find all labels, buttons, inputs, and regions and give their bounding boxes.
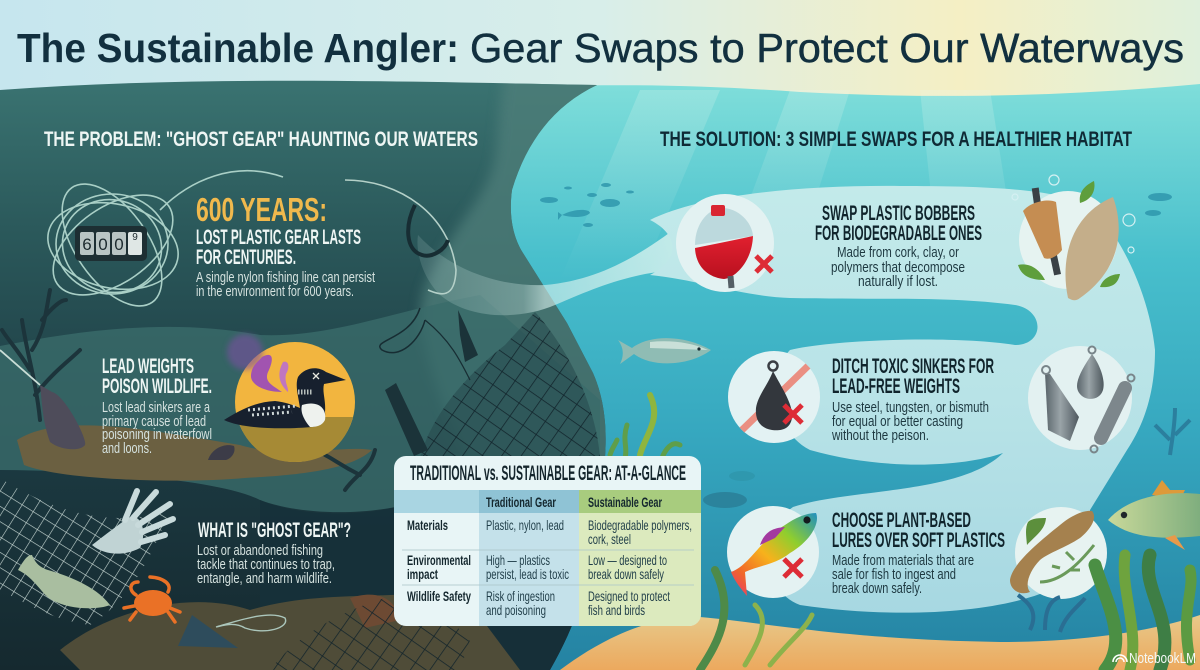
icon: cork and clay bobbers with leaves	[1012, 175, 1135, 300]
path ribbon linking the three swaps	[650, 186, 1155, 613]
icon: tangled fishing line with 600 counter: 6	[82, 235, 92, 254]
text: swap 1: polymers that decompose	[831, 260, 965, 276]
panel: lead weights text: poisoning in waterfowl	[102, 427, 212, 443]
block: what is ghost gear: tackle that continues to trap,	[197, 557, 335, 573]
plastic plume from ghost gear to bobber	[417, 225, 680, 315]
table row: wildlife safety: Wildlife Safety	[407, 588, 471, 604]
ghost net, dark	[420, 312, 600, 458]
text: swap 1	[815, 202, 982, 290]
stat: 600 years	[196, 191, 375, 300]
icon: red plastic bobber with X	[676, 194, 774, 292]
text: swap 1: SWAP PLASTIC BOBBERS	[822, 202, 975, 225]
table row: wildlife safety	[407, 588, 670, 618]
table row: environmental impact: break down safely	[588, 566, 664, 582]
solution 2: ditch toxic sinkers	[728, 346, 1134, 452]
bright green fish at right edge	[1108, 480, 1200, 550]
text: swap 2: for equal or better casting	[832, 414, 963, 430]
panel: lead weights text	[102, 355, 212, 457]
block: what is ghost gear: WHAT IS "GHOST GEAR"?	[198, 519, 351, 542]
icon: lead-free weights	[1028, 346, 1134, 452]
text: swap 3: LURES OVER SOFT PLASTICS	[832, 529, 1005, 552]
panel: lead weights text: POISON WILDLIFE.	[102, 375, 212, 398]
block: what is ghost gear	[197, 519, 351, 587]
table row: environmental impact	[407, 552, 667, 582]
solution 3: plant-based lures	[727, 506, 1107, 599]
block: what is ghost gear: Lost or abandoned fishing	[197, 543, 323, 559]
light rays in water	[560, 90, 1020, 280]
background: clear water, solution side	[450, 84, 1200, 670]
icon: lead sinker on sediment	[208, 445, 235, 460]
text: swap 3: CHOOSE PLANT-BASED	[832, 509, 971, 532]
table header row: Sustainable Gear	[588, 494, 662, 510]
text: swap 3	[832, 509, 1005, 597]
stat: 600 years: A single nylon fishing line can persist	[196, 270, 375, 286]
dark coral silhouettes	[2, 290, 375, 490]
icon: tangled fishing line with 600 counter: 0	[114, 235, 124, 254]
icon: lead sinker crossed out	[728, 351, 820, 443]
sunken post and debris	[385, 310, 478, 456]
silver fish mid water	[618, 338, 711, 364]
background: sky band	[0, 0, 1200, 110]
ghost net bottom with rock	[270, 590, 470, 670]
table row: wildlife safety: Risk of ingestion	[486, 588, 555, 604]
table row: materials: Biodegradable polymers,	[588, 517, 692, 533]
icon: ghostly hand	[92, 491, 173, 554]
panel: lead weights text: LEAD WEIGHTS	[102, 355, 194, 378]
icon: loon in yellow circle with poison	[224, 334, 355, 462]
table header row: Traditional Gear	[486, 494, 556, 510]
icon: tangled fishing line with 600 counter: 0	[98, 235, 108, 254]
text: swap 2: Use steel, tungsten, or bismuth	[832, 400, 989, 416]
icon: orange crab	[124, 577, 180, 622]
panel: lead weights text: and loons.	[102, 441, 152, 457]
text: swap 3: break down safely.	[832, 581, 922, 597]
text: swap 3: sale for fish to ingest and	[832, 567, 956, 583]
comparison table card	[394, 456, 701, 626]
table row: environmental impact: Low — designed to	[588, 552, 667, 568]
stat: 600 years: in the environment for 600 years.	[196, 284, 354, 300]
text: swap 2	[831, 355, 994, 444]
ghost line and hook	[345, 180, 470, 380]
table row: wildlife safety: fish and birds	[588, 602, 645, 618]
text: swap 3: Made from materials that are	[832, 553, 974, 569]
blue coral silhouettes	[1018, 408, 1190, 632]
table row: environmental impact: High — plastics	[486, 552, 550, 568]
icon: tangled fishing line with 600 counter	[36, 167, 283, 323]
school of small fish silhouettes	[540, 183, 1172, 508]
panel: lead weights text: Lost lead sinkers are a	[102, 400, 211, 416]
panel: lead weights text: primary cause of lead	[102, 414, 206, 430]
table row: materials: cork, steel	[588, 531, 631, 547]
seaweed behind mid water	[610, 395, 680, 458]
comparison table card: TRADITIONAL vs. SUSTAINABLE GEAR: AT-A-GLANCE	[410, 462, 686, 485]
table row: wildlife safety: and poisoning	[486, 602, 546, 618]
table header row	[486, 494, 662, 510]
title: Gear Swaps to Protect Our Waterways	[470, 25, 1184, 71]
table row: materials: Materials	[407, 517, 448, 533]
icon: sunken debris and lost line	[178, 615, 286, 648]
stat: 600 years: 600 YEARS:	[196, 191, 327, 228]
title: The Sustainable Angler:	[17, 25, 459, 71]
background: murky water, problem side	[0, 81, 606, 670]
icon: tangled fishing line with 600 counter: 9	[132, 232, 138, 243]
sandy seabed	[560, 615, 1200, 670]
text: swap 1: naturally if lost.	[858, 274, 938, 290]
stat: 600 years: LOST PLASTIC GEAR LASTS	[196, 226, 361, 249]
text: swap 1: FOR BIODEGRADABLE ONES	[815, 222, 982, 245]
icon: plant-based lure and herbs	[1010, 507, 1107, 599]
table row: environmental impact: impact	[407, 566, 438, 582]
heading: the problem: THE PROBLEM: "GHOST GEAR" HAUNTING OUR WATERS	[44, 128, 478, 151]
stat: 600 years: FOR CENTURIES.	[196, 246, 296, 269]
ghost net, light with fish	[0, 478, 173, 625]
icon: rainbow soft plastic lure with X	[727, 506, 819, 598]
text: swap 2: without the peison.	[831, 428, 929, 444]
table column fills	[394, 490, 701, 626]
table row: materials	[407, 517, 692, 547]
murky water bands	[0, 70, 640, 670]
table row: environmental impact: persist, lead is toxic	[486, 566, 569, 582]
table row: materials: Plastic, nylon, lead	[486, 517, 564, 533]
block: what is ghost gear: entangle, and harm wildlife.	[197, 571, 332, 587]
solution 1: swap plastic bobbers	[676, 175, 1135, 300]
text: swap 2: LEAD-FREE WEIGHTS	[832, 375, 960, 398]
table row: wildlife safety: Designed to protect	[588, 588, 670, 604]
title	[17, 25, 1184, 71]
seaweed	[700, 555, 1191, 670]
text: swap 2: DITCH TOXIC SINKERS FOR	[832, 355, 994, 378]
text: swap 1: Made from cork, clay, or	[837, 245, 959, 261]
icon: lead sinker on line	[0, 350, 85, 449]
table row: environmental impact: Environmental	[407, 552, 471, 568]
